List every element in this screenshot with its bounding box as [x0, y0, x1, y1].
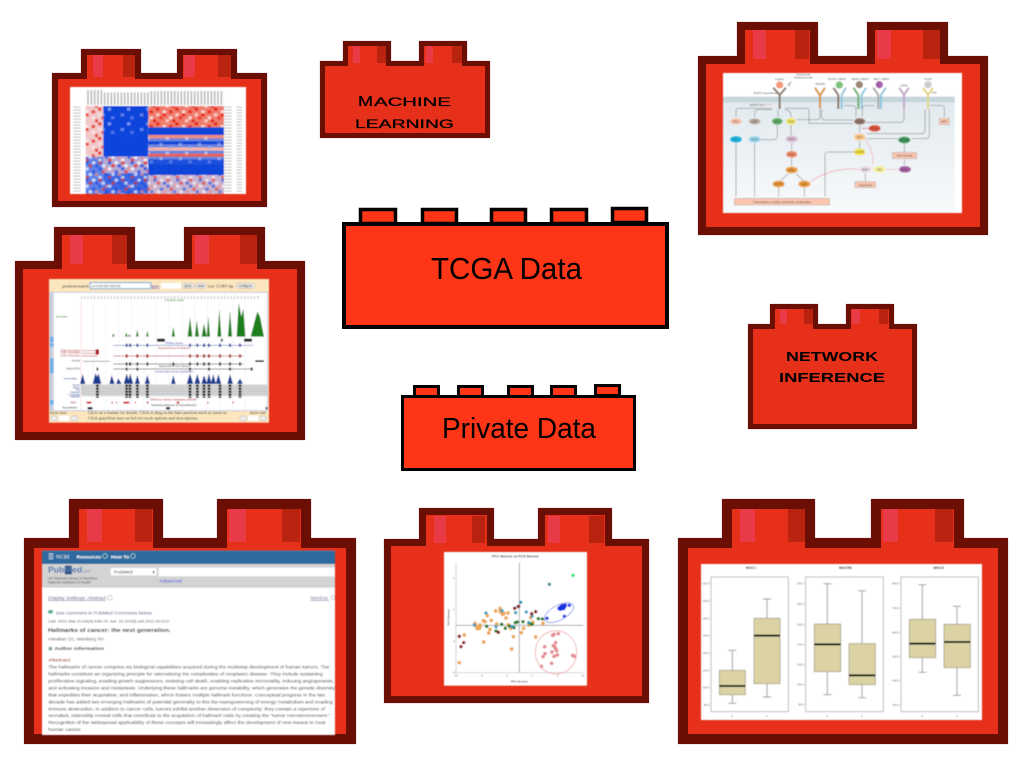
- panel: MUC1: 80.0: [704, 703, 710, 707]
- PubMed page image: Advanced: [159, 578, 182, 583]
- genome browser image: Ecotropic signal: [165, 298, 184, 302]
- panel: MUC8: 600.0: [892, 630, 900, 634]
- PCA scatter plot: 10: [581, 674, 585, 678]
- genome browser image: [49, 279, 269, 423]
- panel: MUC1: 1: [766, 714, 768, 718]
- PCA scatter plot: -6: [480, 674, 483, 678]
- label: Machine learning: LEARNING: [355, 117, 454, 131]
- signalling pathway image: PTEN: [871, 126, 879, 130]
- signalling pathway image: Panitumumab: [794, 76, 813, 80]
- panel: MUC1: 100.0: [702, 686, 710, 690]
- PubMed page image: Display Settings: Abstract: [48, 595, 107, 600]
- PubMed page image: Hallmarks of cancer: the next generation.: [48, 628, 171, 634]
- PCA scatter plot: 2: [453, 608, 455, 612]
- signalling pathway image: STAT: [751, 137, 758, 141]
- PubMed page image: Send to:: [310, 595, 329, 600]
- signalling pathway image: [723, 73, 962, 213]
- signalling pathway image: BAX: [862, 167, 868, 171]
- label: TCGA Data: TCGA Data: [431, 252, 582, 286]
- panel: MUC5B: MUC5B: [839, 566, 852, 570]
- signalling pathway image: Cell survival: [896, 154, 913, 158]
- genome browser image: size 15,001 bp.: [208, 283, 234, 289]
- signalling pathway image: p53: [877, 167, 882, 171]
- signalling pathway image: GAS6: [924, 77, 932, 81]
- panel: MUC8: 400.0: [892, 678, 900, 682]
- genome browser image: Human: [72, 385, 81, 387]
- label: Network inference: NETWORK: [786, 350, 878, 364]
- panel: MUC8: [892, 566, 978, 718]
- abstract text: proliferative signaling, evading growth suppressors, resisting cell death, enabling replicative immortality, inducing angiogenesis,: [48, 679, 334, 685]
- abstract text: that expedites their acquisition, and inflammation, which fosters multiple hallmark functions. Conceptual progress in the last: [48, 692, 326, 698]
- signalling pathway image: AKT: [857, 135, 863, 139]
- PubMed page image: Pub: [48, 565, 64, 574]
- PubMed page image: Author information: [54, 646, 104, 652]
- signalling pathway image: NF-κB: [900, 138, 909, 142]
- panel: MUC1: 200.0: [702, 599, 710, 603]
- brick: Machine learning: [322, 44, 488, 136]
- heatmap image: [70, 87, 246, 194]
- genome browser image: Conservation: [63, 377, 78, 380]
- panel: MUC5B: 140.0: [797, 642, 805, 646]
- signalling pathway image: Transcription, protein synthesis, proliferation: [753, 200, 812, 204]
- PubMed page image: [42, 551, 336, 735]
- panel: MUC8: 300.0: [892, 703, 900, 707]
- PCA scatter plot: -2: [505, 674, 508, 678]
- genome browser image: configure: [238, 284, 252, 288]
- genome browser image: Zebrafish: [70, 396, 81, 399]
- signalling pathway image: ERK: [801, 182, 807, 186]
- signalling pathway image: AXL: [932, 90, 937, 94]
- genome browser image: Spliced ESTs: [66, 369, 81, 371]
- panel: MUC1: 160.0: [702, 634, 710, 638]
- genome browser image: move start: [50, 410, 68, 415]
- signalling pathway image: VEGFR: [815, 82, 826, 86]
- box plot image: [701, 564, 982, 720]
- genome browser image: move end: [250, 410, 266, 415]
- panel: MUC1: 220.0: [702, 582, 710, 586]
- PCA scatter plot: -10: [454, 674, 458, 678]
- panel: MUC5B: 200.0: [797, 582, 805, 586]
- PubMed page image: NCBI: [56, 554, 70, 560]
- brick: PubMed abstract: [29, 504, 351, 739]
- brick: Private Data: [402, 386, 634, 470]
- signalling pathway image: EGFR homodimer: [753, 91, 777, 95]
- genome browser image: UCSC Transcribed: [61, 352, 81, 355]
- panel: MUC1: 180.0: [702, 616, 710, 620]
- label: Machine learning: ACHINE: [374, 95, 451, 109]
- genome browser image: Dog: [76, 390, 81, 392]
- panel: MUC1: [702, 566, 788, 718]
- panel: MUC1: 120.0: [702, 668, 710, 672]
- abstract text: The hallmarks of cancer comprise six biological capabilities acquired during the multistep development of human tumors. The: [48, 665, 330, 671]
- PCA scatter plot: [444, 552, 587, 686]
- brick: pathway diagram: [702, 26, 984, 231]
- signalling pathway image: IGFR: [900, 83, 908, 87]
- PubMed page image: PubMed: [114, 569, 133, 575]
- panel: MUC8: 1: [956, 714, 958, 718]
- genome browser image: SNPs from Various Databases (dbSNP): [150, 398, 197, 402]
- PubMed page image: How To: [111, 554, 129, 560]
- abstract text: recruited, ostensibly normal cells that contribute to the acquisition of hallmark traits by creating the "tumor microenvironment.": [48, 713, 331, 719]
- PubMed page image: Abstract: [48, 658, 71, 663]
- genome browser image: clear: [197, 284, 205, 288]
- coverage peaks: [112, 303, 264, 337]
- signalling pathway image: JAK: [752, 119, 757, 123]
- panel: MUC5B: 0: [826, 714, 828, 718]
- PCA scatter plot: 4: [453, 576, 455, 580]
- signalling pathway image: BCL2: [901, 167, 909, 171]
- panel: MUC5B: 100.0: [797, 682, 805, 686]
- PCA scatter plot: PC3 Scores: [447, 609, 451, 626]
- panel: MUC1: 0: [731, 714, 733, 718]
- PubMed page image: Cell. 2011 Mar 4;144(5):646-74. doi: 10.1016/j.cell.2011.02.013.: [48, 619, 170, 624]
- genome browser image: RefSeq Genes: [166, 341, 184, 345]
- genome browser image: Opossum: [70, 392, 80, 394]
- panel: MUC5B: 180.0: [797, 602, 805, 606]
- abstract text: Recognition of the widespread applicability of these concepts will increasingly affect the development of new means to treat: [48, 720, 326, 726]
- PubMed page image: US National Library of Medicine: [48, 577, 97, 581]
- genome browser image: jump: [183, 284, 192, 288]
- genome browser image: Ecotropic: [56, 315, 68, 319]
- PCA scatter plot: PC1 Scores vs PC3 Scores: [492, 555, 539, 559]
- genome browser image: Spliced ESTs from Mouse: [159, 364, 190, 368]
- genome browser image: Click gray/blue bars on left for track options and descriptions.: [88, 415, 199, 420]
- brick: heatmap: [55, 52, 264, 204]
- genome browser image: Encode: [72, 361, 81, 363]
- panel: MUC5B: 160.0: [797, 622, 805, 626]
- PubMed page image: Med: [65, 565, 82, 574]
- signalling pathway image: SRC: [774, 119, 781, 123]
- PubMed page image: Hanahan D1, Weinberg RA.: [48, 637, 105, 642]
- conservation peaks: [80, 373, 243, 384]
- signalling pathway image: Cetuximab: [796, 73, 811, 77]
- label: Network inference: INFERENCE: [779, 371, 885, 385]
- PCA scatter plot: -6: [452, 670, 455, 674]
- signalling pathway image: HER2–HER3: [851, 77, 869, 81]
- genome browser image: Mouse: [73, 387, 81, 389]
- PubMed page image: ⬍: [152, 569, 155, 574]
- panel: MUC1: 140.0: [702, 651, 710, 655]
- genome browser image: Click on a feature for details. Click or drag in the base position track to zoom in.: [88, 410, 228, 415]
- abstract text: decade has added two emerging hallmarks of potential generality to this list-reprogramming of energy metabolism and evading: [48, 699, 333, 705]
- genome browser image: gene: [152, 283, 159, 288]
- signalling pathway image: RAF: [789, 152, 795, 156]
- genome browser image: Ensembl Gene Predictions: [159, 346, 191, 350]
- panel: MUC8: 700.0: [892, 606, 900, 610]
- PCA scatter plot: 6: [557, 674, 559, 678]
- PubMed page image: Resources: [77, 554, 101, 560]
- genome browser image: SNPs: [70, 402, 77, 404]
- signalling pathway image: Ligand: [775, 77, 784, 81]
- panel: MUC8: 0: [921, 714, 923, 718]
- PCA scatter plot: -2: [452, 639, 455, 643]
- label: Private Data: Private Data: [442, 413, 597, 445]
- genome browser image: chr4:250,000-265,000: [91, 284, 121, 288]
- signalling pathway image: MET–HER3: [873, 77, 890, 81]
- panel: MUC1: MUC1: [746, 566, 756, 570]
- signalling pathway image: MAPK: [774, 182, 783, 186]
- brick: box plots: [683, 504, 1003, 739]
- signalling pathway image: PI3K: [856, 119, 863, 123]
- signalling pathway image: mTOR: [855, 150, 865, 154]
- label: Machine learning: M: [358, 93, 373, 110]
- abstract text: [48, 665, 336, 733]
- brick: PCA scatter: [388, 512, 646, 700]
- PCA scatter plot: 2: [532, 674, 534, 678]
- brick: Network inference: [750, 306, 914, 426]
- abstract text: human cancer.: [48, 727, 82, 733]
- genome browser image: position/search: [62, 283, 89, 288]
- genome browser image: X_tropicalis: [68, 393, 81, 396]
- abstract text: immune destruction. In addition to cancer cells, tumors exhibit another dimension of complexity: they contain a repertoire of: [48, 706, 326, 712]
- genome browser image: Conservation across vertebrates: [155, 369, 194, 373]
- brick: genome browser: [19, 231, 301, 436]
- PubMed page image: National Institutes of Health: [48, 581, 91, 585]
- panel: MUC5B: [797, 566, 883, 718]
- PCA scatter plot: PC1 Scores: [511, 679, 528, 683]
- genome browser image: RepeatMasker: [62, 407, 78, 410]
- panel: MUC8: MUC8: [933, 566, 944, 570]
- genome browser image: Repeating Elements by RepeatMasker: [151, 403, 197, 407]
- signalling pathway image: EGFR TKI: [750, 103, 764, 107]
- panel: MUC5B: 1: [861, 714, 863, 718]
- genome browser image: UCSC Transcribed: [61, 354, 81, 357]
- genome browser image: UCSC Transcribed: [61, 349, 81, 352]
- abstract text: and activating invasion and metastasis. Underlying these hallmarks are genome instability, which generates the genetic diversity: [48, 685, 336, 691]
- brick: TCGA Data: [344, 208, 667, 327]
- signalling pathway image: RAS: [789, 137, 795, 141]
- panel: MUC8: 800.0: [892, 582, 900, 586]
- signalling pathway image: EMT: [941, 120, 948, 124]
- panel: MUC5B: 120.0: [797, 662, 805, 666]
- abstract text: hallmarks constitute an organizing principle for rationalizing the complexities of neoplastic disease. They include sustaining: [48, 672, 323, 678]
- panel: MUC8: 500.0: [892, 654, 900, 658]
- PubMed page image: .gov: [82, 568, 91, 573]
- signalling pathway image: PKC: [733, 137, 740, 141]
- signalling pathway image: Apoptosis: [859, 183, 872, 187]
- signalling pathway image: PLC: [733, 119, 740, 123]
- signalling pathway image: EGFR–HER3: [828, 77, 846, 81]
- panel: MUC5B: 80.0: [799, 702, 805, 706]
- signalling pathway image: MEK: [788, 168, 795, 172]
- PubMed page image: See comment in PubMed Commons below: [56, 610, 153, 615]
- signalling pathway image: SOS: [788, 119, 794, 123]
